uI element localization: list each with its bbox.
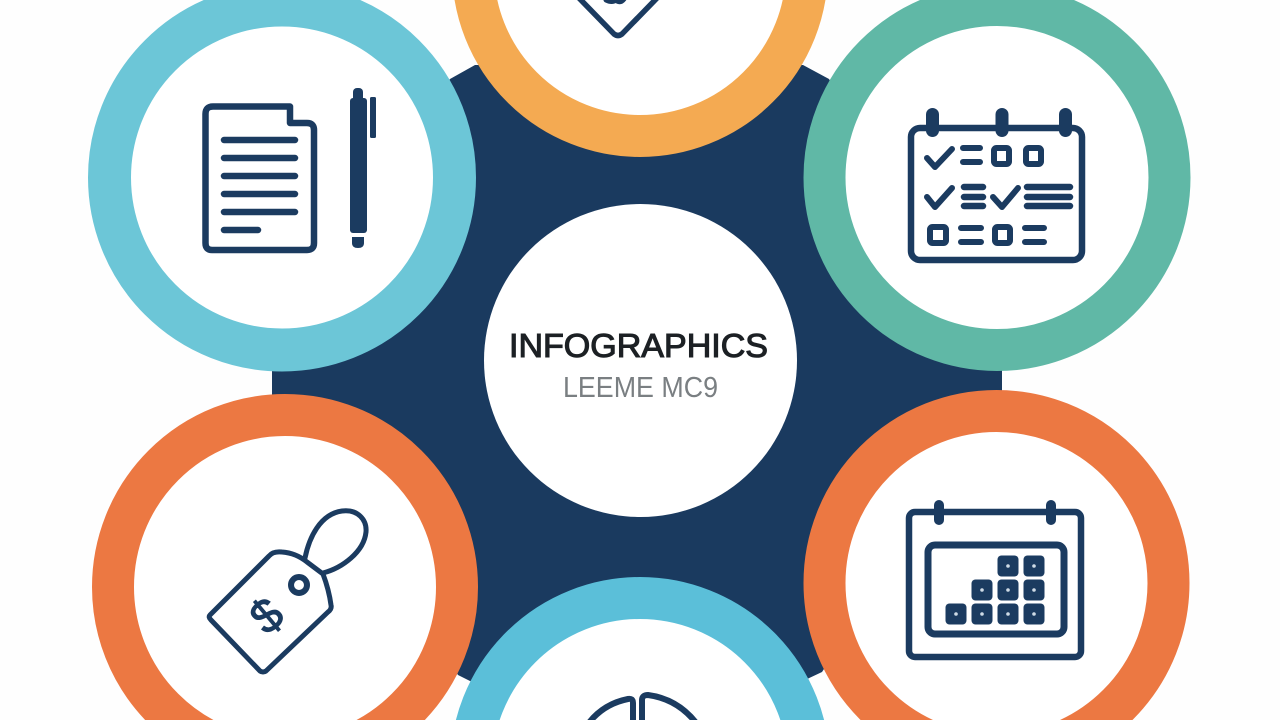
- ring: orange left: [113, 415, 457, 720]
- ring: light blue: [110, 5, 454, 350]
- icon: top tag: [578, 0, 658, 36]
- icon: price tag: [209, 511, 366, 672]
- panel: top tag: [473, 0, 807, 136]
- panel: price tag: [113, 415, 457, 720]
- ring: sky blue: [471, 598, 809, 720]
- subtitle: LEEME MC9: [563, 372, 718, 404]
- panel: checklist calendar: [824, 5, 1170, 350]
- icon: price tag: $: [239, 587, 293, 644]
- icon: bar calendar: [909, 500, 1081, 657]
- panel: bar calendar: [824, 411, 1168, 720]
- panel: bottom chart: [471, 598, 809, 720]
- icon: pen: [350, 88, 376, 248]
- panel: document and pen: [110, 5, 454, 350]
- panel: central label: [484, 204, 797, 517]
- ring: teal: [824, 5, 1170, 350]
- navy hexagon backdrop: [272, 65, 1002, 682]
- icon: document: [206, 106, 314, 250]
- icon: checklist calendar: [911, 108, 1082, 260]
- ring: amber: [473, 0, 807, 136]
- ring: orange right: [824, 411, 1168, 720]
- center circle: [484, 204, 797, 517]
- title: INFOGRAPHICS: [509, 327, 768, 364]
- icon: pie chart: [588, 695, 697, 720]
